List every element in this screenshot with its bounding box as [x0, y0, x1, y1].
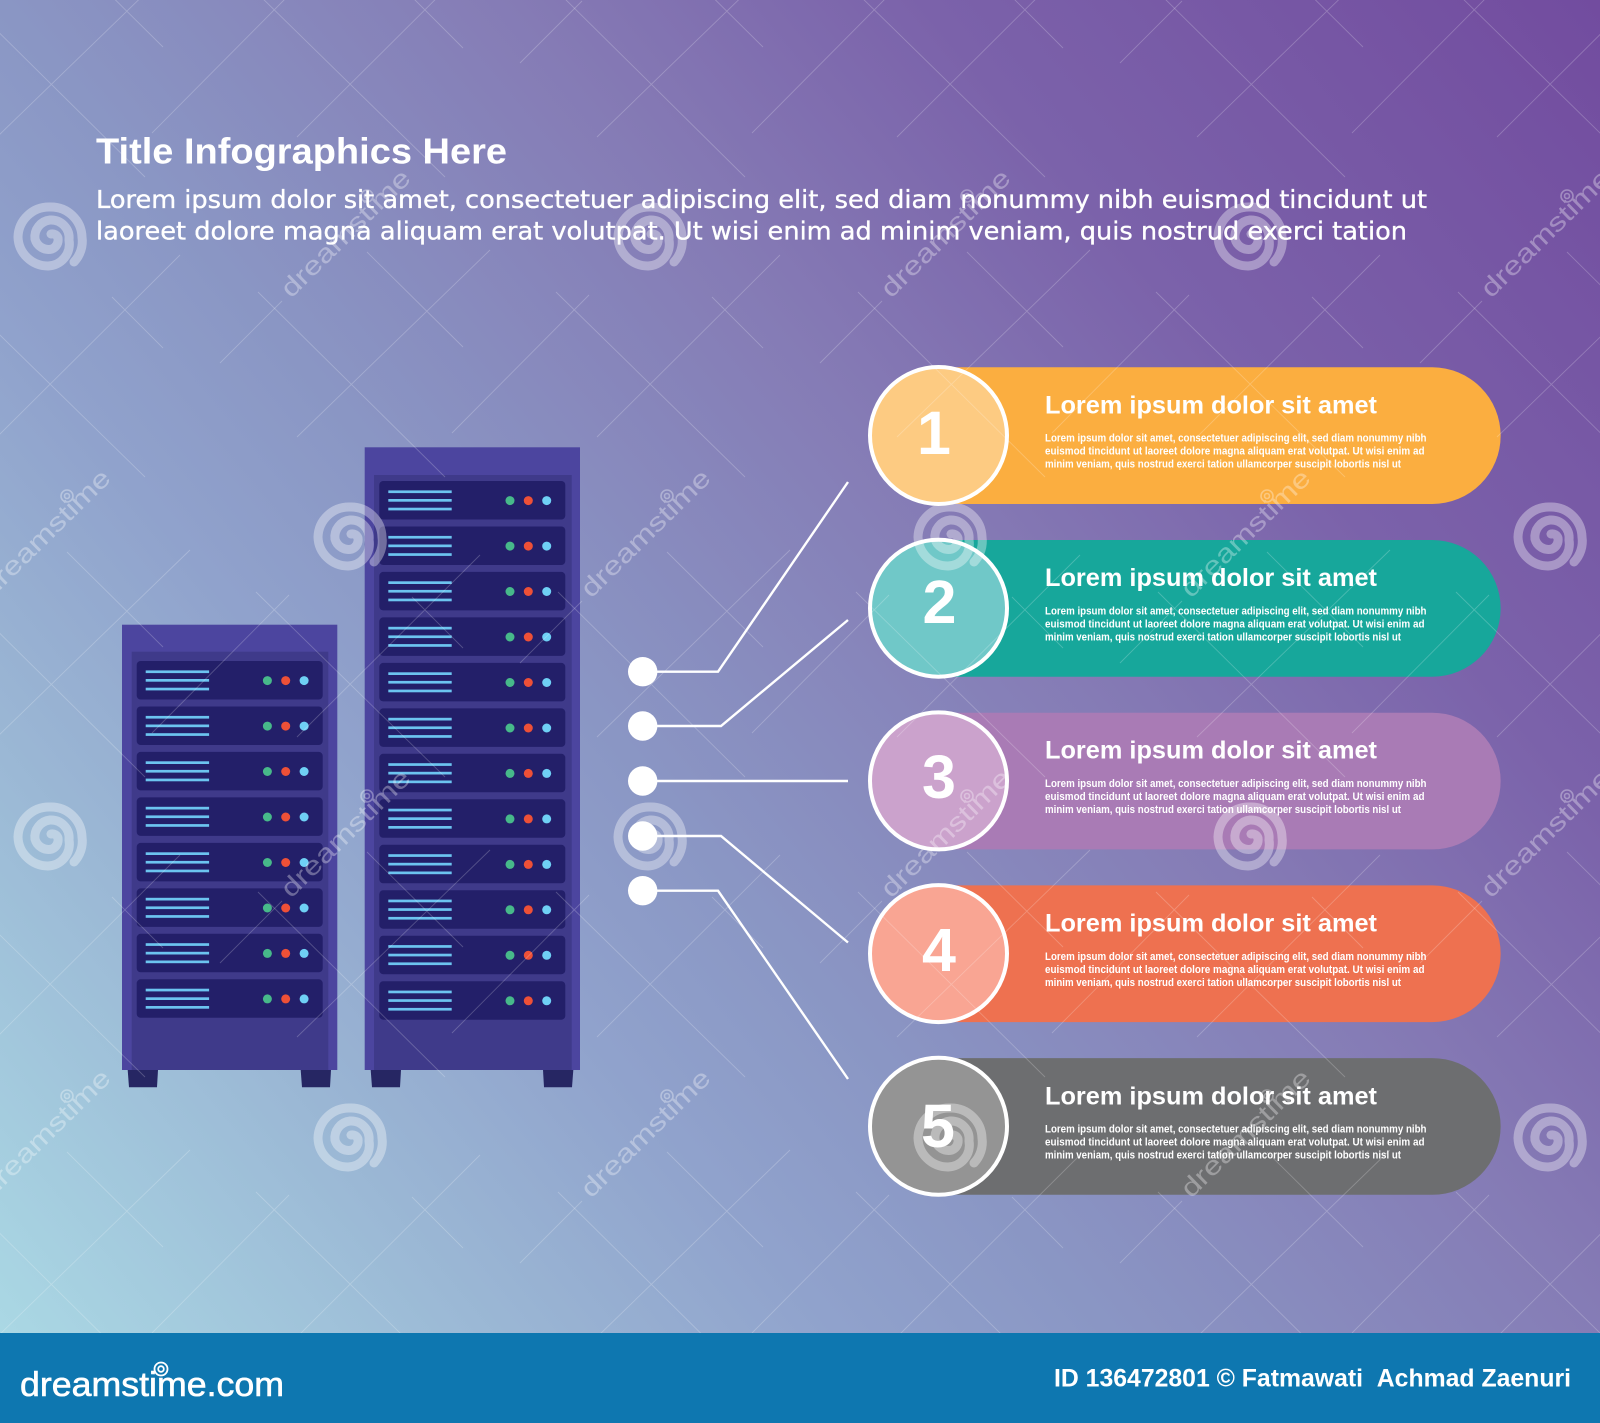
footer credit: ID 136472801 © Fatmawati Achmad Zaenuri — [1054, 1365, 1571, 1393]
item 2: Lorem ipsum dolor sit amet, consectetuer adipiscing elit, sed diam nonummy nibh — [1045, 605, 1426, 617]
server unit 2 — [137, 706, 323, 745]
server unit 6 — [137, 888, 323, 927]
server unit 3 — [137, 752, 323, 790]
watermark wordmarks: dreamstime — [874, 763, 1016, 903]
server rack: tall — [365, 447, 580, 1087]
item 4: minim veniam, quis nostrud exerci tation ullamcorper suscipit lobortis nisl ut — [1045, 977, 1401, 989]
intro text block: laoreet dolore magna aliquam erat volutpat. Ut wisi enim ad minim veniam, quis nostrud exerci tation — [96, 217, 1407, 246]
item 4: euismod tincidunt ut laoreet dolore magna aliquam erat volutpat. Ut wisi enim ad — [1045, 964, 1424, 976]
item 5: minim veniam, quis nostrud exerci tation ullamcorper suscipit lobortis nisl ut — [1045, 1150, 1401, 1162]
item 1: Lorem ipsum dolor sit amet, consectetuer adipiscing elit, sed diam nonummy nibh — [1045, 433, 1426, 445]
watermark wordmarks: dreamstime — [274, 763, 416, 903]
item 1: Lorem ipsum dolor sit amet — [1045, 391, 1378, 419]
server unit 9 — [379, 845, 565, 883]
rack foot left — [128, 1070, 158, 1087]
item 2: 2 — [923, 568, 956, 636]
server unit 3 — [379, 572, 565, 610]
watermark wordmarks — [0, 163, 1600, 1203]
connector 1 — [643, 482, 848, 672]
title: Title Infographics Here — [96, 130, 507, 171]
footer band — [0, 1333, 1600, 1423]
item 2: euismod tincidunt ut laoreet dolore magna aliquam erat volutpat. Ut wisi enim ad — [1045, 618, 1424, 630]
item 4: Lorem ipsum dolor sit amet, consectetuer adipiscing elit, sed diam nonummy nibh — [1045, 951, 1426, 963]
server unit 1 — [379, 481, 565, 520]
item 3: Lorem ipsum dolor sit amet, consectetuer adipiscing elit, sed diam nonummy nibh — [1045, 778, 1426, 790]
watermark wordmarks: dreamstime — [274, 163, 416, 303]
server unit 11 — [379, 936, 565, 974]
watermark wordmarks: dreamstime — [1474, 763, 1600, 903]
item 1: euismod tincidunt ut laoreet dolore magna aliquam erat volutpat. Ut wisi enim ad — [1045, 446, 1424, 458]
item 5 — [870, 1058, 1501, 1195]
server unit 10 — [379, 890, 565, 929]
server unit 4 — [379, 617, 565, 656]
item 1 — [870, 367, 1501, 504]
watermark wordmarks: dreamstime — [1474, 163, 1600, 303]
server rack: short — [122, 625, 337, 1087]
item 3: 3 — [922, 743, 956, 811]
item 3 — [870, 712, 1501, 849]
connector 4 — [643, 836, 848, 942]
footer logo wordmark: dreamstime.com — [20, 1366, 284, 1404]
intro text block: Lorem ipsum dolor sit amet, consectetuer adipiscing elit, sed diam nonummy nibh euismod tincidunt ut — [96, 185, 1427, 214]
watermark spirals — [18, 207, 1582, 1167]
server unit 5 — [137, 843, 323, 881]
item 4: Lorem ipsum dolor sit amet — [1045, 909, 1378, 937]
item 5: Lorem ipsum dolor sit amet — [1045, 1082, 1378, 1110]
item 5: euismod tincidunt ut laoreet dolore magna aliquam erat volutpat. Ut wisi enim ad — [1045, 1136, 1424, 1148]
item 2 — [870, 540, 1501, 677]
rack foot right — [543, 1070, 573, 1087]
item 2: minim veniam, quis nostrud exerci tation ullamcorper suscipit lobortis nisl ut — [1045, 631, 1401, 643]
connector 5 — [643, 891, 848, 1079]
server unit 6 — [379, 708, 565, 747]
item 1: minim veniam, quis nostrud exerci tation ullamcorper suscipit lobortis nisl ut — [1045, 459, 1401, 471]
server unit 8 — [137, 979, 323, 1018]
server unit 7 — [379, 754, 565, 792]
server unit 8 — [379, 799, 565, 838]
connector 3 — [643, 780, 848, 782]
watermark wordmarks: dreamstime — [874, 163, 1016, 303]
rack foot right — [301, 1070, 331, 1087]
footer logo spiral — [154, 1362, 168, 1376]
rack foot left — [371, 1070, 401, 1087]
item 4: 4 — [922, 916, 956, 984]
item 3: Lorem ipsum dolor sit amet — [1045, 737, 1378, 765]
server unit 12 — [379, 981, 565, 1020]
intro text block — [96, 185, 1427, 246]
connector 2 — [643, 620, 848, 726]
item 5: 5 — [921, 1092, 955, 1160]
item 3: minim veniam, quis nostrud exerci tation ullamcorper suscipit lobortis nisl ut — [1045, 804, 1401, 816]
server unit 7 — [137, 934, 323, 972]
item 3: euismod tincidunt ut laoreet dolore magna aliquam erat volutpat. Ut wisi enim ad — [1045, 791, 1424, 803]
watermark wordmarks: dreamstime — [1174, 463, 1316, 603]
server unit 1 — [137, 661, 323, 700]
item 1: 1 — [917, 399, 951, 467]
watermark wordmarks: dreamstime — [574, 463, 716, 603]
watermark wordmarks: dreamstime — [1174, 1063, 1316, 1203]
item 4 — [870, 885, 1501, 1022]
server unit 4 — [137, 797, 323, 836]
server unit 2 — [379, 526, 565, 565]
item 2: Lorem ipsum dolor sit amet — [1045, 564, 1378, 592]
connectors from rack to items — [643, 482, 848, 1079]
connector dots — [628, 657, 657, 905]
item 5: Lorem ipsum dolor sit amet, consectetuer adipiscing elit, sed diam nonummy nibh — [1045, 1124, 1426, 1136]
server unit 5 — [379, 663, 565, 701]
watermark wordmarks: dreamstime — [574, 1063, 716, 1203]
